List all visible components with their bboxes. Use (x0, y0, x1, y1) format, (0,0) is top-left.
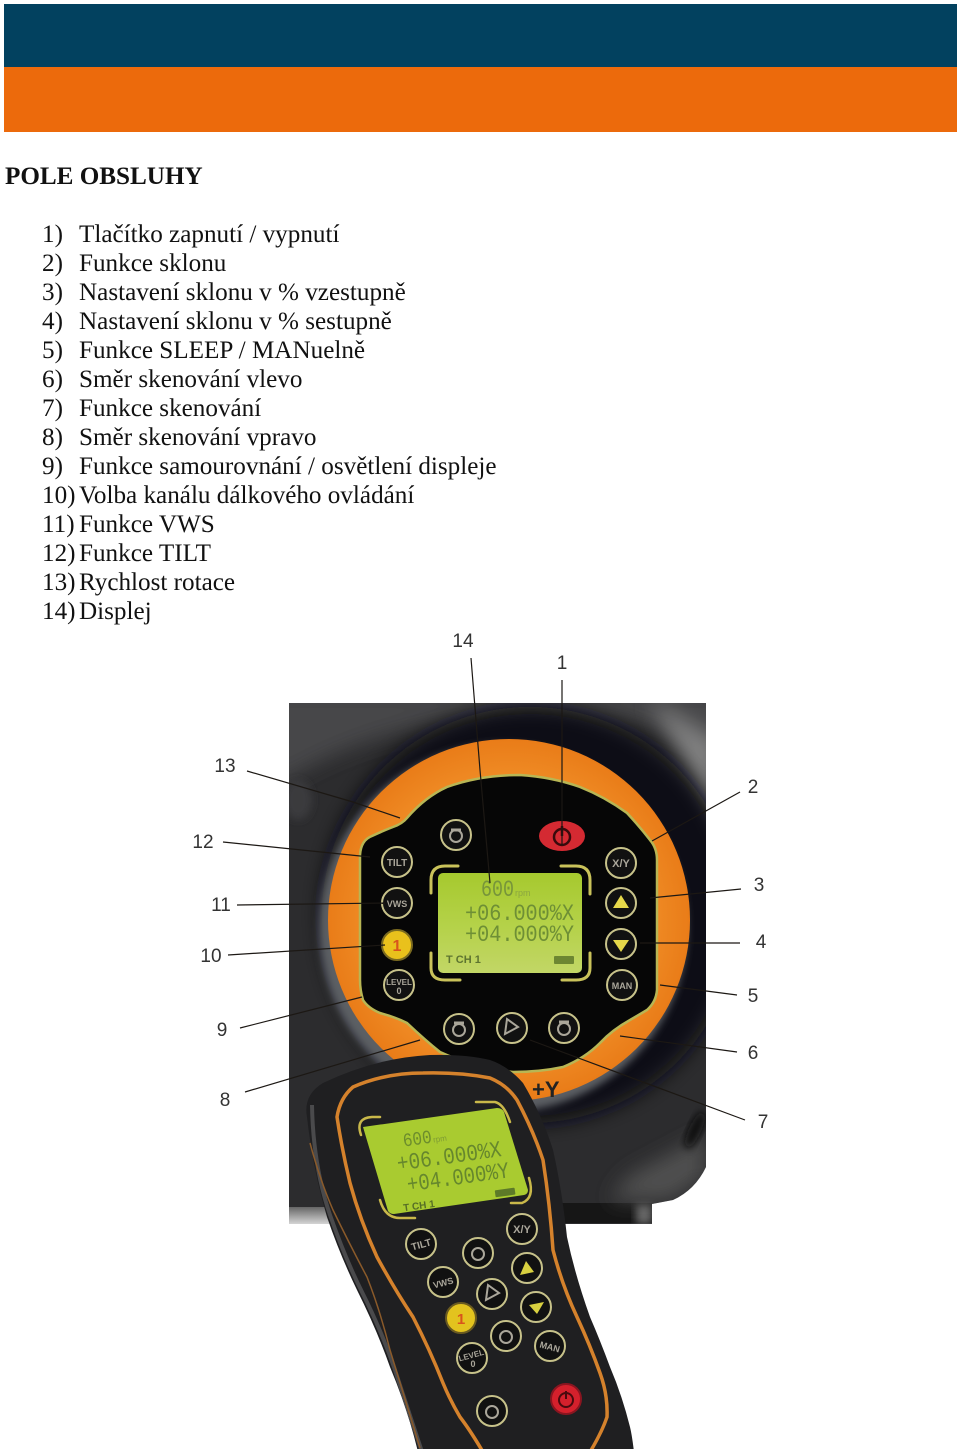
item 4 (42, 308, 392, 335)
callout numbers: 1 (557, 653, 567, 674)
callout numbers: 6 (748, 1043, 758, 1064)
numbered list of controls: 14) (42, 598, 76, 625)
remote button: scan right (491, 1321, 521, 1351)
numbered list of controls: 11) (42, 511, 75, 538)
orange ring (328, 739, 690, 1101)
remote button: MAN (535, 1331, 565, 1361)
remote button: channel (446, 1303, 476, 1333)
numbered list of controls: 13) (42, 569, 76, 596)
button: LEVEL (384, 970, 414, 1000)
button: MAN: MAN (612, 981, 632, 991)
remote LCD: +06.000%X (395, 1137, 503, 1178)
remote button: scan left (463, 1238, 493, 1268)
numbered list of controls: Funkce SLEEP / MANuelně (79, 337, 365, 364)
header band: orange (4, 67, 957, 132)
header band: navy (4, 4, 957, 67)
numbered list of controls: 9) (42, 453, 63, 480)
button: X/Y: X/Y (612, 858, 631, 870)
callout numbers: 12 (192, 832, 214, 853)
callout numbers: 10 (200, 946, 222, 967)
item 6 (42, 366, 302, 393)
remote button: power (551, 1384, 581, 1414)
item 13 (42, 569, 235, 596)
LCD display: +06.000%X (465, 901, 574, 927)
callout numbers: 14 (452, 631, 474, 652)
numbered list of controls: 6) (42, 366, 63, 393)
button: rotation speed (441, 820, 471, 850)
display frame brackets (431, 866, 590, 980)
remote button: LEVEL: 0 (470, 1359, 476, 1369)
remote button: LEVEL (457, 1343, 487, 1373)
numbered list of controls: 3) (42, 279, 63, 306)
item 1 (42, 221, 340, 248)
button: scan right (549, 1013, 579, 1043)
remote LCD: rpm (432, 1134, 448, 1144)
numbered list of controls: 4) (42, 308, 63, 335)
remote button: channel: 1 (457, 1311, 465, 1328)
heading: POLE OBSLUHY (5, 163, 203, 190)
LCD display: 600 (481, 877, 514, 903)
numbered list of controls: 2) (42, 250, 63, 277)
callout numbers: 4 (756, 932, 767, 953)
button: TILT (382, 847, 412, 877)
button: VWS: VWS (387, 899, 407, 909)
remote button: TILT: TILT (410, 1237, 433, 1253)
remote edge highlight (312, 1105, 422, 1452)
callout numbers: 9 (217, 1020, 227, 1041)
LCD display: +04.000%Y (465, 922, 574, 948)
numbered list of controls: Funkce VWS (79, 511, 215, 538)
numbered list of controls (42, 221, 497, 625)
numbered list of controls: Tlačítko zapnutí / vypnutí (79, 221, 339, 248)
numbered list of controls: Nastavení sklonu v % vzestupně (79, 279, 406, 306)
numbered list of controls: Displej (79, 598, 152, 625)
numbered list of controls: 12) (42, 540, 76, 567)
callout numbers: 5 (748, 986, 758, 1007)
scanner body photo (289, 703, 706, 1224)
item 2 (42, 250, 226, 277)
button: VWS (382, 888, 412, 918)
numbered list of controls: 8) (42, 424, 63, 451)
numbered list of controls: 1) (42, 221, 63, 248)
callout numbers: 7 (758, 1112, 768, 1133)
button: channel: 1 (393, 938, 402, 955)
Y mark on ring: +Y (532, 1077, 560, 1102)
remote outer thin trim (310, 1143, 420, 1448)
item 11 (42, 511, 215, 538)
button: scan (497, 1013, 527, 1043)
button: LEVEL: 0 (396, 986, 402, 996)
LCD display: T CH 1 (446, 954, 481, 966)
remote orange trim (337, 1073, 607, 1452)
numbered list of controls: 7) (42, 395, 63, 422)
black control panel (360, 775, 657, 1072)
numbered list of controls: Nastavení sklonu v % sestupně (79, 308, 392, 335)
item 7 (42, 395, 261, 422)
button: channel (382, 930, 412, 960)
numbered list of controls: 5) (42, 337, 63, 364)
remote LCD: T CH 1 (403, 1199, 436, 1214)
remote display brackets (359, 1102, 531, 1218)
remote button: down (521, 1292, 551, 1322)
numbered list of controls: 10) (42, 482, 76, 509)
callout numbers: 8 (220, 1090, 230, 1111)
remote button: TILT (406, 1229, 436, 1259)
remote LCD: +04.000%Y (405, 1158, 511, 1198)
item 14 (42, 598, 152, 625)
callout numbers: 2 (748, 777, 758, 798)
LCD display: rpm (515, 888, 530, 898)
callout numbers: 3 (754, 875, 764, 896)
LCD display (438, 873, 582, 973)
remote control (306, 1055, 634, 1452)
numbered list of controls: Funkce samourovnání / osvětlení displeje (79, 453, 497, 480)
numbered list of controls: Funkce skenování (79, 395, 261, 422)
remote button: speed (477, 1396, 507, 1426)
callout numbers: 13 (214, 756, 236, 777)
button: TILT: TILT (387, 858, 407, 869)
item 10 (42, 482, 414, 509)
callout numbers: 11 (211, 895, 231, 916)
item 12 (42, 540, 211, 567)
numbered list of controls: Funkce sklonu (79, 250, 226, 277)
numbered list of controls: Volba kanálu dálkového ovládání (79, 482, 414, 509)
item 8 (42, 424, 316, 451)
leader lines (223, 658, 745, 1120)
callout numbers (192, 631, 768, 1133)
remote button: X/Y (507, 1214, 537, 1244)
item 5 (42, 337, 365, 364)
remote body (306, 1055, 634, 1452)
numbered list of controls: Rychlost rotace (79, 569, 235, 596)
remote button: LEVEL: LEVEL (458, 1348, 485, 1363)
remote button: VWS: VWS (432, 1275, 454, 1290)
button: X/Y (606, 848, 636, 878)
remote button: MAN: MAN (539, 1339, 561, 1354)
numbered list of controls: Směr skenování vpravo (79, 424, 316, 451)
numbered list of controls: Funkce TILT (79, 540, 211, 567)
button: up (606, 888, 636, 918)
button: down (606, 929, 636, 959)
numbered list of controls: Směr skenování vlevo (79, 366, 302, 393)
item 3 (42, 279, 406, 306)
button: power (539, 821, 585, 851)
button: LEVEL: LEVEL (386, 978, 412, 987)
button: scan left (444, 1014, 474, 1044)
remote button: scan (477, 1279, 507, 1309)
item 9 (42, 453, 497, 480)
remote button: up (512, 1253, 542, 1283)
remote button: VWS (428, 1267, 458, 1297)
remote LCD (363, 1108, 528, 1214)
device diagram (194, 634, 768, 1449)
remote LCD: 600 (402, 1127, 433, 1153)
button: MAN (607, 970, 637, 1000)
remote button: X/Y: X/Y (513, 1224, 532, 1236)
